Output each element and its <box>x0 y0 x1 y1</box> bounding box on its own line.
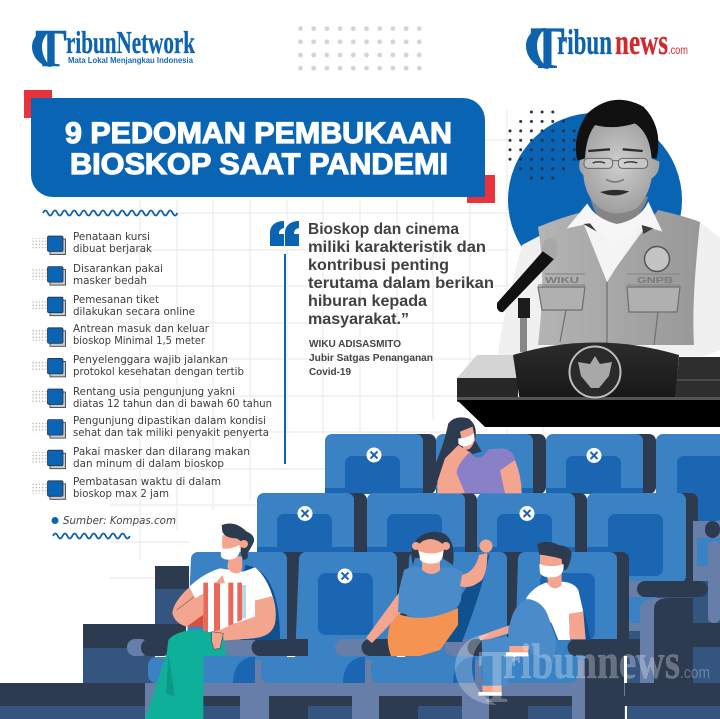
icon: no-sit markers <box>298 448 602 584</box>
photo: speaker at podium: GNPB <box>637 276 673 285</box>
item 5: Penyelenggara wajib jalankan <box>73 354 228 366</box>
item 4: bioskop Minimal 1,5 meter <box>73 335 206 347</box>
item 3 <box>31 294 195 318</box>
item 8 <box>31 446 250 470</box>
title banner: 9 PEDOMAN PEMBUKAAN <box>65 117 452 150</box>
item 1: Penataan kursi <box>73 231 150 243</box>
item 9: Pembatasan waktu di dalam <box>73 476 221 488</box>
attribution: Jubir Satgas Penanganan <box>309 352 433 364</box>
logo: Tribunnews.com: news <box>615 22 668 62</box>
nose and mouth <box>606 179 624 182</box>
person: woman in middle <box>366 532 492 656</box>
quote text: kontribusi penting <box>308 257 449 274</box>
dot matrix <box>508 110 583 186</box>
item 7: Pengunjung dipastikan dalam kondisi <box>73 415 266 427</box>
logo: TribunNetwork: Mata Lokal Menjangkau Indonesia <box>68 56 194 65</box>
attribution: WIKU ADISASMITO <box>309 338 401 350</box>
item 9 <box>31 476 221 500</box>
watermark: Tribunnews <box>455 633 710 719</box>
front row <box>145 552 640 719</box>
vest pockets <box>538 274 680 345</box>
title banner <box>24 90 495 203</box>
vest labels: WIKU <box>545 276 579 285</box>
watermark: Tribunnews: T <box>478 635 516 719</box>
wave divider bottom <box>53 534 130 538</box>
item 4 <box>31 323 210 347</box>
item 6 <box>31 386 272 410</box>
decorative dot grid <box>298 26 422 79</box>
right side structure <box>624 521 720 719</box>
middle row <box>257 493 698 588</box>
quote text <box>308 221 494 328</box>
back row <box>325 434 720 719</box>
source note: Sumber: Kompas.com <box>63 515 176 527</box>
quote text: masyarakat.” <box>308 311 409 328</box>
logo: Tribunnews.com: .com <box>668 43 688 57</box>
logo: Tribunnews.com <box>526 15 688 81</box>
face <box>579 123 659 213</box>
logo: TribunNetwork: ribunNetwork <box>66 24 195 60</box>
blue circle behind speaker <box>508 113 682 287</box>
attribution <box>309 338 433 378</box>
shirt front <box>583 222 645 282</box>
podium emblem <box>570 346 620 398</box>
head <box>567 100 662 244</box>
person: woman in back row <box>433 417 522 493</box>
item 2 <box>31 263 163 287</box>
illustration: cinema seats <box>0 417 720 719</box>
hair <box>576 100 658 161</box>
quote text: hiburan kepada <box>308 293 427 310</box>
logo: Tribunnews.com: T <box>530 15 565 81</box>
logo: TribunNetwork <box>32 18 195 78</box>
attribution: Covid-19 <box>309 366 351 378</box>
panel: guideline list <box>31 231 272 500</box>
item 1: dibuat berjarak <box>73 243 153 255</box>
item 6: Rentang usia pengunjung yakni <box>73 386 235 398</box>
watermark: Tribunnews: .com <box>680 663 710 682</box>
microphone <box>497 238 558 352</box>
quote text: terutama dalam berikan <box>308 275 494 292</box>
item 6: diatas 12 tahun dan di bawah 60 tahun <box>73 398 272 410</box>
vest <box>538 210 700 345</box>
item 8: dan minum di dalam bioskop <box>73 458 224 470</box>
title banner: BIOSKOP SAAT PANDEMI <box>70 148 448 181</box>
collar <box>567 202 662 244</box>
panel: quote <box>270 221 494 464</box>
item 4: Antrean masuk dan keluar <box>73 323 210 335</box>
item 3: Pemesanan tiket <box>73 294 159 306</box>
icon: quotation mark <box>270 221 299 246</box>
logo: Tribunnews.com: ribun <box>557 22 612 62</box>
photo: speaker at podium <box>457 100 720 427</box>
item 8: Pakai masker dan dilarang makan <box>73 446 250 458</box>
left side structure <box>0 566 189 719</box>
sleeves <box>498 215 720 356</box>
neck <box>590 197 648 233</box>
quote text: Bioskop dan cinema <box>308 221 459 238</box>
item 2: masker bedah <box>73 275 147 287</box>
item 9: bioskop max 2 jam <box>73 488 169 500</box>
item 3: dilakukan secara online <box>73 306 195 318</box>
item 1 <box>31 231 153 255</box>
glasses <box>584 149 648 168</box>
item 7: sehat dan tak miliki penyakit penyerta <box>73 427 269 439</box>
vest badge <box>644 246 670 272</box>
item 5 <box>31 354 244 378</box>
item 7 <box>31 415 269 439</box>
podium <box>457 342 720 427</box>
item 5: protokol kesehatan dengan tertib <box>73 366 244 378</box>
logo: TribunNetwork: T <box>35 18 67 78</box>
wave divider top <box>43 210 177 216</box>
item 2: Disarankan pakai <box>73 263 163 275</box>
person: boy on the right <box>478 542 591 696</box>
quote rule <box>284 254 286 464</box>
person: man with popcorn <box>145 523 280 719</box>
quote text: miliki karakteristik dan <box>308 239 486 256</box>
